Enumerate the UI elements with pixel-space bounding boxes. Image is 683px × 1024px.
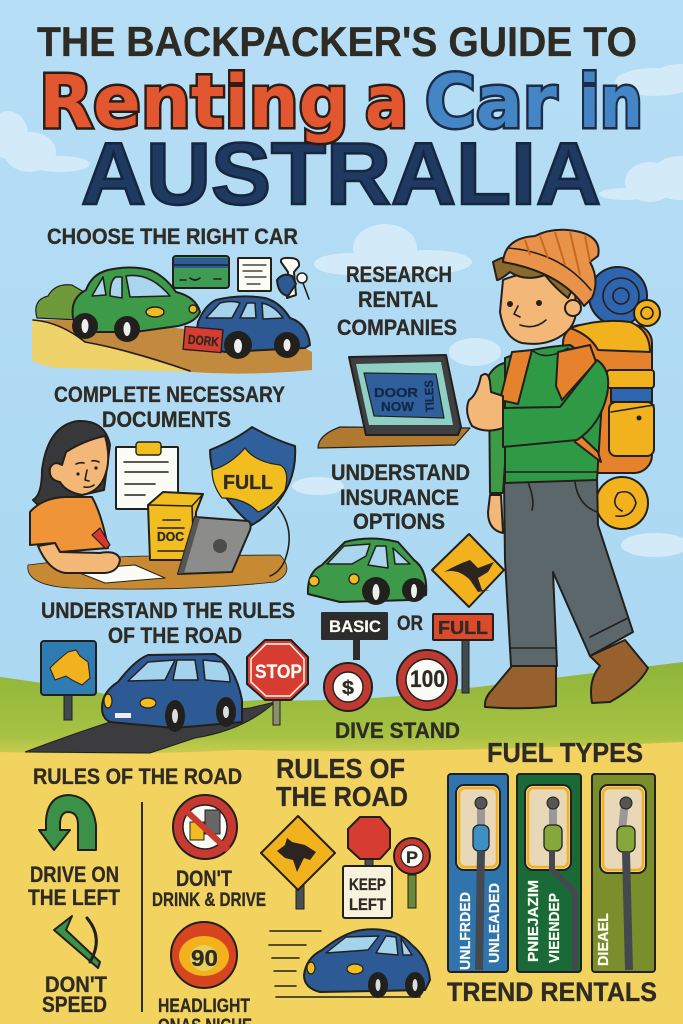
fuel pump: unleaded: UNLEADED bbox=[486, 883, 503, 963]
sign: basic bbox=[321, 612, 388, 660]
text: headlight on as niche bbox=[158, 996, 252, 1024]
panel: complete necessary documents bbox=[28, 382, 295, 589]
icon: bush bbox=[36, 285, 84, 320]
heading: rules of the road: THE ROAD bbox=[276, 781, 408, 812]
icon: u-turn arrow bbox=[39, 795, 96, 850]
document box: DOC bbox=[157, 529, 185, 544]
backpack bbox=[563, 267, 660, 529]
heading: research rental companies: RENTAL bbox=[358, 287, 438, 312]
panel: rules of the road signs bbox=[261, 753, 430, 998]
crossed arm bbox=[503, 360, 608, 447]
clipboard bbox=[116, 442, 178, 509]
title: Renting a Car in: a bbox=[365, 60, 408, 145]
panel: fuel types bbox=[447, 737, 657, 1007]
sign: parking circle bbox=[394, 838, 430, 908]
sign: dollar circle bbox=[324, 663, 372, 711]
clouds bbox=[0, 64, 683, 557]
heading: research rental companies: RESEARCH bbox=[346, 262, 452, 287]
text: trend rentals: TREND RENTALS bbox=[447, 977, 657, 1007]
heading: complete necessary documents: DOCUMENTS bbox=[102, 407, 231, 432]
laptop with booking screen bbox=[349, 355, 461, 435]
sign: keep left: KEEP bbox=[349, 875, 386, 894]
fuel pump: premium unleaded: PNIEJAZIM bbox=[525, 880, 542, 962]
face bbox=[493, 256, 581, 344]
title: Renting a Car in bbox=[39, 60, 643, 145]
heading: understand insurance options bbox=[331, 460, 470, 534]
text: drive on the left: DRIVE ON bbox=[30, 862, 119, 887]
boots bbox=[485, 640, 648, 708]
sign: 100 speed limit: 100 bbox=[410, 666, 445, 693]
title: line one: THE BACKPACKER'S GUIDE TO bbox=[37, 18, 637, 65]
document box bbox=[148, 492, 203, 560]
icon: green car bbox=[72, 268, 200, 342]
panel: research rental companies bbox=[318, 262, 470, 448]
icon: blue car: DORK bbox=[187, 332, 220, 349]
background: sky bbox=[0, 0, 683, 760]
text: headlight on as niche: HEADLIGHT bbox=[158, 996, 250, 1017]
sign: no drink and drive bbox=[173, 795, 237, 859]
sign: full bbox=[433, 614, 493, 693]
sign: 90 headlight: 90 bbox=[191, 945, 218, 971]
text: or: OR bbox=[397, 612, 423, 635]
laptop with booking screen: TILES bbox=[422, 380, 437, 412]
sign: keep left bbox=[343, 866, 392, 918]
background: yellow ground bbox=[0, 742, 683, 1024]
text: don't drink and drive bbox=[152, 866, 266, 911]
sign: australia map bbox=[41, 641, 96, 720]
text: don't speed: DON'T bbox=[45, 972, 108, 997]
panel: choose the right car bbox=[32, 224, 312, 374]
hanging hand bbox=[488, 495, 503, 533]
laptop bbox=[178, 517, 251, 574]
sign: stop bbox=[247, 640, 308, 725]
sign: 90 headlight bbox=[171, 922, 237, 988]
sign: basic: BASIC bbox=[329, 617, 381, 636]
heading: complete necessary documents bbox=[54, 382, 285, 432]
icon: blue car moving bbox=[304, 929, 430, 998]
heading: rules of the road: RULES OF bbox=[276, 753, 405, 784]
fuel pump: diesel: DIEAEL bbox=[595, 913, 612, 966]
fuel pump: premium unleaded: VIEENDEP bbox=[546, 893, 563, 963]
title: Renting a Car in: in bbox=[579, 60, 643, 145]
shoulder straps bbox=[500, 345, 601, 462]
title: Renting a Car in: Renting bbox=[39, 60, 349, 145]
sign: kangaroo bbox=[432, 534, 504, 607]
text: don't drink and drive: DON'T bbox=[176, 866, 232, 891]
road bbox=[25, 702, 275, 753]
panel: understand the rules of the road bbox=[25, 598, 308, 753]
shield: full bbox=[210, 427, 295, 576]
sign: full: FULL bbox=[438, 618, 488, 638]
fuel pump: diesel bbox=[592, 774, 655, 972]
sweater bbox=[505, 345, 604, 483]
title: Australia: AUSTRALIA bbox=[81, 124, 601, 223]
title: Renting a Car in: Car bbox=[425, 60, 557, 145]
divider line bbox=[141, 802, 143, 1012]
heading: understand insurance options: OPTIONS bbox=[353, 509, 445, 534]
heading: understand the rules of the road bbox=[41, 598, 295, 648]
person writing bbox=[30, 421, 120, 573]
fuel pump: premium unleaded bbox=[517, 774, 581, 972]
trousers bbox=[504, 478, 633, 666]
text: dive stand: DIVE STAND bbox=[335, 718, 460, 743]
icon: credit card bbox=[173, 256, 229, 288]
shield: full: FULL bbox=[223, 472, 273, 494]
heading: research rental companies: COMPANIES bbox=[337, 315, 457, 340]
icon: green hatchback bbox=[308, 538, 426, 605]
heading: rules of the road bbox=[276, 753, 408, 812]
desk bbox=[318, 427, 470, 448]
icon: paper bbox=[238, 258, 271, 291]
speed lines bbox=[269, 931, 420, 997]
illustration: backpacker bbox=[467, 230, 660, 708]
hanging arm bbox=[489, 362, 512, 493]
laptop with booking screen: DOOR bbox=[374, 385, 419, 400]
text: drive on the left bbox=[28, 862, 120, 910]
icon: keys bbox=[277, 258, 309, 299]
heading: understand insurance options: UNDERSTAND bbox=[331, 460, 470, 485]
thumbs-up hand bbox=[467, 374, 503, 431]
sign: small stop bbox=[348, 817, 390, 868]
panel: understand insurance options bbox=[308, 460, 504, 743]
sign: stop: STOP bbox=[255, 662, 302, 683]
sign: 100 speed limit bbox=[397, 650, 457, 710]
sign: yellow diamond animal bbox=[261, 816, 335, 909]
table bbox=[28, 555, 287, 589]
heading: choose the right car: CHOOSE THE RIGHT CAR bbox=[47, 224, 298, 249]
icon: blue car bbox=[183, 296, 310, 359]
icon: blue van bbox=[102, 654, 242, 732]
heading: understand the rules of the road: UNDERSTAND THE RULES bbox=[41, 598, 295, 623]
background: grass hill bbox=[0, 662, 683, 760]
fuel pump: unleaded: UNLFRDED bbox=[457, 892, 474, 970]
panel: rules of the road left bbox=[28, 764, 266, 1024]
orange beanie bbox=[503, 230, 599, 306]
text: don't speed: SPEED bbox=[42, 992, 107, 1017]
heading: rules of the road: RULES OF THE ROAD bbox=[33, 764, 242, 789]
heading: research rental companies bbox=[337, 262, 457, 340]
text: don't speed bbox=[42, 972, 108, 1017]
sign: keep left: LEFT bbox=[349, 895, 387, 914]
paper on table bbox=[72, 565, 165, 583]
fuel pump: unleaded bbox=[448, 774, 508, 972]
heading: fuel types: FUEL TYPES bbox=[487, 737, 643, 768]
sign: parking circle: P bbox=[406, 848, 418, 867]
sign: dollar circle: $ bbox=[342, 678, 354, 699]
text: don't drink and drive: DRINK & DRIVE bbox=[152, 890, 266, 911]
ground: sand and dirt road bbox=[32, 320, 312, 374]
heading: understand insurance options: INSURANCE bbox=[340, 485, 459, 510]
heading: understand the rules of the road: OF THE ROAD bbox=[108, 623, 242, 648]
laptop with booking screen: NOW bbox=[381, 399, 415, 414]
text: drive on the left: THE LEFT bbox=[28, 885, 120, 910]
icon: green bent arrow bbox=[54, 916, 100, 968]
heading: complete necessary documents: COMPLETE NECESSARY bbox=[54, 382, 285, 407]
